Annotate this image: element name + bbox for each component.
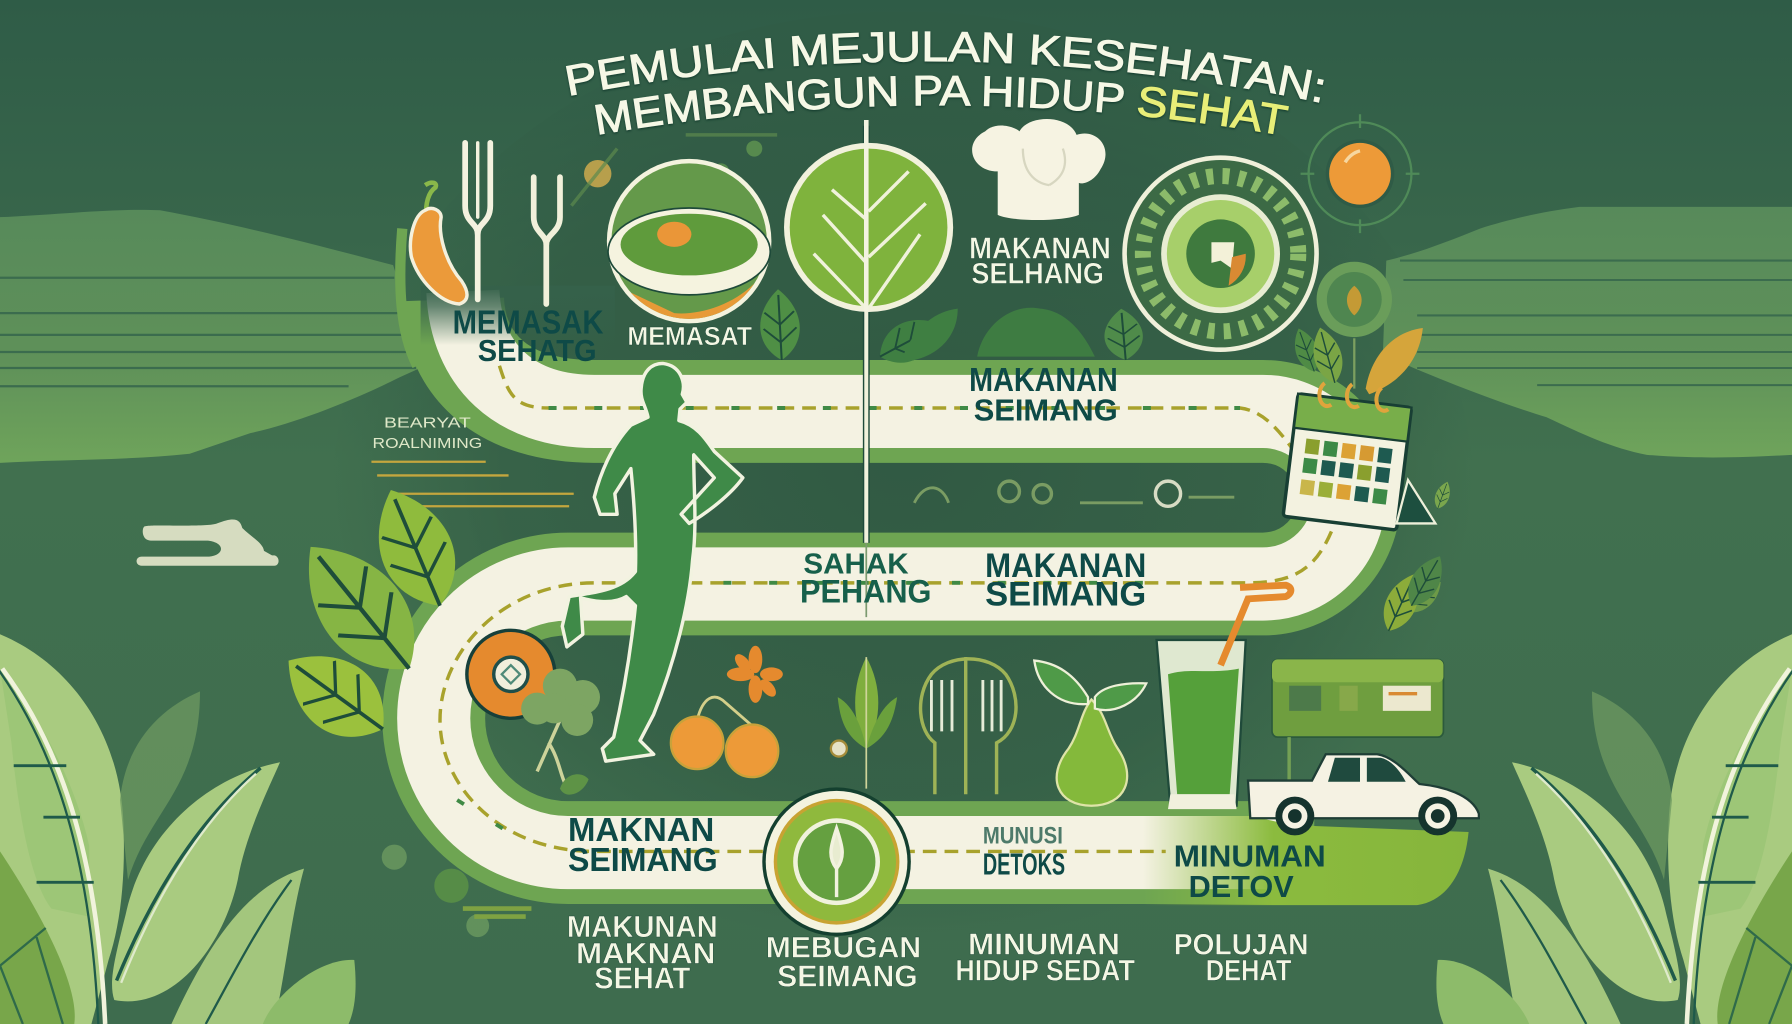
dashed route line xyxy=(440,366,1331,851)
icon: bottom medallion xyxy=(762,787,911,936)
icon: soup bowl circle xyxy=(607,159,771,323)
label: minuman detov: MINUMAN xyxy=(1174,838,1326,873)
icon: orange target xyxy=(1301,114,1419,233)
label: minuman detov: DETOV xyxy=(1189,869,1294,904)
label: makanan seimang middle xyxy=(985,547,1146,614)
icon: large leaves left xyxy=(268,476,473,758)
path end green section xyxy=(1143,816,1469,905)
icon: billboard xyxy=(1272,659,1443,783)
icon: calendar xyxy=(1283,378,1413,530)
label: munusi detoks xyxy=(983,822,1065,881)
icon: cherries and flower xyxy=(671,646,783,777)
text block: minuman hidup sedat xyxy=(955,926,1135,988)
label: makanan seimang middle: MAKANAN xyxy=(985,547,1146,585)
icon: small green badge xyxy=(1317,262,1392,389)
label: makanan selhang: MAKANAN xyxy=(969,230,1111,265)
text block: makunan makanan sehat: MAKNAN xyxy=(576,937,715,970)
icon: fork two xyxy=(534,177,560,304)
background hills left xyxy=(0,210,425,463)
label: minuman detov xyxy=(1174,838,1326,904)
text block: makunan makanan sehat: SEHAT xyxy=(594,961,690,996)
small text block: left notes: ROALNIMING xyxy=(373,436,482,452)
path top fade xyxy=(421,286,615,345)
icon: medallion plate xyxy=(1122,155,1319,352)
icon: pickup truck xyxy=(1248,754,1479,835)
label: memasat: MEMASAT xyxy=(627,321,752,351)
text block: makunan makanan sehat xyxy=(567,909,718,996)
icon: orange fruit slice xyxy=(465,629,557,720)
icon: pear xyxy=(1034,661,1146,806)
label: maknan seimang lower xyxy=(568,812,718,879)
icon: green drink glass xyxy=(1157,585,1291,809)
icon: fork one xyxy=(465,143,490,299)
label: munusi detoks: MUNUSI xyxy=(983,822,1063,849)
label: makanan selhang xyxy=(969,230,1111,290)
title: PEMULAI MEJULAN KESEHATAN: xyxy=(566,31,1324,104)
small text block: left notes xyxy=(371,415,574,506)
text block: minuman hidup sedat: HIDUP SEDAT xyxy=(955,955,1135,988)
label: makanan selhang: SELHANG xyxy=(971,257,1104,290)
icon: plant sprig xyxy=(831,657,897,789)
icon: chef hat xyxy=(972,119,1106,220)
text block: mebugan seimang: SEIMANG xyxy=(777,958,918,993)
text block: minuman hidup sedat: MINUMAN xyxy=(968,926,1120,961)
text block: mebugan seimang: MEBUGAN xyxy=(766,932,921,965)
small ornaments above path xyxy=(571,135,777,206)
icon: chili xyxy=(410,183,467,304)
icon: right side sprigs xyxy=(1375,479,1454,637)
label: memasak sehatg xyxy=(453,305,603,368)
text block: makunan makanan sehat: MAKUNAN xyxy=(567,909,718,944)
label: makanan seimang middle: SEIMANG xyxy=(985,576,1146,614)
icon: leaves mid xyxy=(758,288,1423,394)
text block: polujan dehat: DEHAT xyxy=(1206,955,1291,988)
title: MEMBANGUN PA HIDUP SEHAT xyxy=(594,76,1290,136)
icon: double fork arch xyxy=(921,657,1016,794)
label: maknan seimang lower: SEIMANG xyxy=(568,842,718,879)
icon: leaf circle xyxy=(784,120,953,312)
inner loop small icons xyxy=(914,481,1234,506)
icon: calendar stand xyxy=(1397,480,1435,523)
decorative leaves bottom left xyxy=(0,634,356,1024)
icon: broccoli xyxy=(521,669,600,795)
label: makanan seimang upper: SEIMANG xyxy=(974,393,1118,428)
label: sahak pehang: SAHAK xyxy=(803,549,909,581)
decorative leaves bottom right xyxy=(1436,634,1792,1024)
small text block: left notes: BEARYAT xyxy=(384,415,471,431)
label: sahak pehang xyxy=(800,549,931,609)
label: memasak sehatg: MEMASAK xyxy=(453,305,603,342)
background hills right xyxy=(1383,207,1792,457)
label: munusi detoks: DETOKS xyxy=(983,846,1065,881)
stem line xyxy=(863,126,869,617)
icon: cream swoosh marker xyxy=(137,519,279,566)
text block: polujan dehat: POLUJAN xyxy=(1174,928,1309,961)
text block: polujan dehat xyxy=(1174,928,1309,988)
label: makanan seimang upper xyxy=(969,362,1118,428)
icon: bottom left herbs xyxy=(382,845,531,937)
winding path xyxy=(400,229,1349,853)
text block: mebugan seimang xyxy=(766,932,921,993)
icon: runner xyxy=(562,363,743,761)
label: maknan seimang lower: MAKNAN xyxy=(568,812,714,849)
label: sahak pehang: PEHANG xyxy=(800,573,931,609)
label: memasak sehatg: SEHATG xyxy=(478,333,597,368)
label: makanan seimang upper: MAKANAN xyxy=(969,362,1118,399)
